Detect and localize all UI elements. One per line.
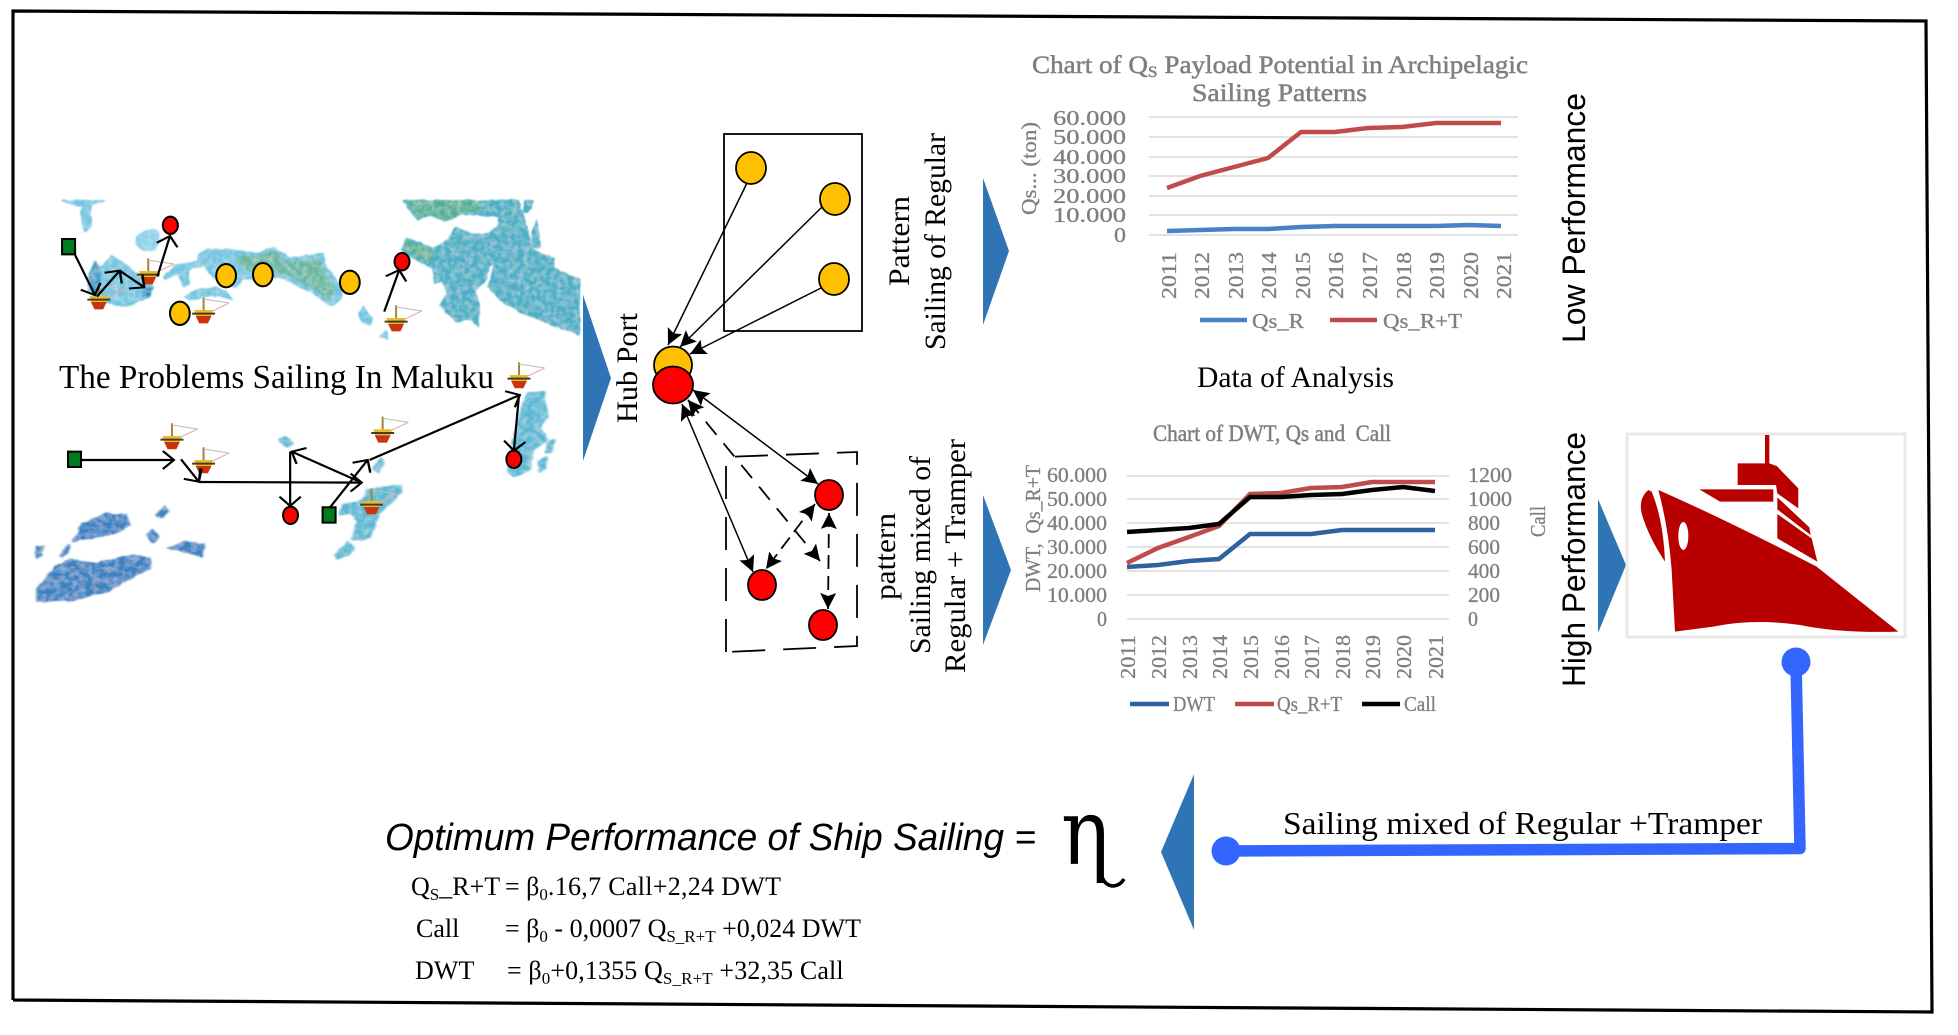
- y axis labels: 0: [1114, 223, 1126, 247]
- heading: optimum performance formula: Optimum Performance of Ship Sailing =: [385, 817, 1036, 859]
- x axis years: [1116, 634, 1448, 679]
- x axis years: 2014: [1257, 251, 1281, 299]
- equation: DWT: +32,35 Call: [713, 956, 844, 985]
- left y axis labels: 50.000: [1047, 487, 1107, 511]
- map islands: north west group: [62, 201, 387, 340]
- label: pattern sailing of regular: [883, 133, 952, 350]
- equation: Call: S_R+T: [666, 927, 716, 946]
- equation: DWT: DWT: [415, 956, 475, 985]
- series: Qs_R+T: [1127, 482, 1435, 563]
- arrow: map to hub port: [583, 295, 611, 461]
- label: low performance: Low Performance: [1556, 93, 1592, 343]
- y axis labels: 60.000: [1053, 106, 1126, 130]
- equation: Qs R+T: 0: [539, 885, 548, 904]
- arrow: regular pattern to chart: [983, 178, 1009, 325]
- chart title: [1032, 52, 1528, 107]
- chart title: Chart of DWT, Qs and Call: [1153, 421, 1391, 446]
- y axis labels: 20.000: [1053, 184, 1126, 208]
- gridlines: [1127, 476, 1449, 619]
- panel: mixed pattern dashed box: [726, 452, 857, 652]
- left y axis labels: 20.000: [1047, 559, 1107, 583]
- y axis labels: 10.000: [1053, 203, 1126, 227]
- chart title: Sailing Patterns: [1192, 80, 1367, 107]
- right y axis labels: 1200: [1468, 463, 1512, 487]
- x axis years: 2012: [1190, 252, 1214, 299]
- equation: Call: Call: [416, 914, 459, 943]
- right y axis title: Call: [1526, 506, 1550, 537]
- x axis years: 2011: [1157, 252, 1181, 299]
- left y axis labels: 30.000: [1047, 535, 1107, 559]
- label: pattern sailing mixed: Sailing mixed of: [904, 456, 937, 654]
- label: pattern sailing mixed: [869, 439, 972, 673]
- x axis years: 2012: [1147, 635, 1171, 679]
- symbol: eta: η: [1061, 779, 1109, 886]
- equation: Qs R+T: _R+T: [438, 872, 500, 901]
- y axis labels: [1053, 106, 1126, 247]
- series: Qs_R: [1167, 225, 1501, 231]
- regular port nodes: [736, 152, 850, 295]
- chart legend: Qs_R+T: [1383, 309, 1462, 333]
- equation: DWT: = β: [507, 956, 542, 985]
- chart legend: DWT: [1173, 692, 1215, 716]
- x axis years: 2015: [1239, 635, 1263, 679]
- right y axis labels: 600: [1468, 535, 1500, 559]
- left y axis labels: 10.000: [1047, 583, 1107, 607]
- x axis years: 2016: [1270, 635, 1294, 679]
- label: hub port: Hub Port: [611, 312, 644, 423]
- label: pattern sailing of regular: Pattern: [883, 196, 916, 286]
- right y axis labels: 1000: [1468, 487, 1512, 511]
- mixed route arrows: [682, 390, 829, 609]
- chart title: S: [1148, 64, 1158, 81]
- y axis title: Qs... (ton): [1017, 122, 1041, 215]
- equation: DWT: +0,1355 Q: [550, 956, 663, 985]
- ship glyph: [1641, 435, 1898, 632]
- equation: Qs R+T: S: [430, 885, 439, 904]
- x axis years: 2016: [1324, 252, 1348, 299]
- regression equations: [411, 872, 861, 988]
- equation: Qs R+T: .16,7 Call+2,24 DWT: [548, 872, 781, 901]
- arrow: mixed pattern to chart: [983, 495, 1011, 645]
- ship frame: [1627, 434, 1905, 637]
- icon: red ship in frame: [1627, 434, 1905, 637]
- equation: Call: = β: [505, 914, 539, 943]
- equation: Call: - 0,0007 Q: [548, 914, 667, 943]
- chart legend: Qs_R: [1252, 309, 1304, 333]
- chart title: Payload Potential in Archipelagic: [1158, 52, 1528, 79]
- label: pattern sailing mixed: pattern: [869, 513, 902, 600]
- map islands: north east mass: [402, 201, 579, 335]
- equation: Qs R+T: Q: [411, 872, 430, 901]
- map islands: south group: [36, 392, 555, 602]
- series: Qs_R+T: [1167, 123, 1501, 188]
- right y axis labels: 400: [1468, 559, 1500, 583]
- x axis years: 2019: [1425, 252, 1449, 299]
- right y axis labels: 800: [1468, 511, 1500, 535]
- label: high performance: High Performance: [1556, 432, 1592, 687]
- label: pattern sailing of regular: Sailing of Regular: [919, 133, 952, 350]
- chart legend: [1130, 692, 1436, 716]
- right y axis labels: [1468, 463, 1512, 631]
- y axis labels: 30.000: [1053, 164, 1126, 188]
- x axis years: 2013: [1178, 635, 1202, 679]
- line chart: DWT, Qs and Call: [1021, 421, 1550, 716]
- x axis years: 2015: [1291, 252, 1315, 299]
- map heading: The Problems Sailing In Maluku: [59, 359, 494, 396]
- label: pattern sailing mixed: Regular + Tramper: [939, 439, 972, 673]
- chart title: Chart of Q: [1032, 52, 1139, 79]
- line chart: Qs payload potential: [1017, 52, 1528, 333]
- network diagram: regular and tramper routes: [653, 134, 862, 652]
- x axis years: 2021: [1424, 635, 1448, 679]
- right y axis labels: 200: [1468, 583, 1500, 607]
- x axis years: 2014: [1208, 634, 1232, 679]
- x axis years: 2017: [1358, 252, 1382, 299]
- x axis years: 2017: [1300, 635, 1324, 679]
- x axis years: [1157, 251, 1516, 299]
- label: sailing mixed of regular + tramper: Sailing mixed of Regular +Tramper: [1283, 805, 1762, 841]
- gridlines: [1149, 117, 1518, 235]
- chart legend: Qs_R+T: [1277, 692, 1342, 716]
- regular route arrows: [668, 183, 822, 354]
- x axis years: 2019: [1361, 635, 1385, 679]
- right y axis labels: 0: [1468, 607, 1478, 631]
- equation: Qs R+T: = β: [505, 872, 539, 901]
- equation: Call: 0: [539, 927, 548, 946]
- x axis years: 2018: [1331, 635, 1355, 679]
- arrow: high performance to ship: [1598, 499, 1626, 633]
- route arrows on map: [75, 236, 520, 507]
- left y axis labels: 60.000: [1047, 463, 1107, 487]
- equation: Call: +0,024 DWT: [716, 914, 861, 943]
- arrow: to optimum performance: [1161, 774, 1194, 930]
- left y axis labels: 0: [1097, 607, 1107, 631]
- series: Call: [1127, 487, 1435, 532]
- chart legend: Call: [1404, 692, 1436, 716]
- series: DWT: [1127, 530, 1435, 567]
- panel: regular pattern box: [724, 134, 862, 331]
- map port markers: [62, 217, 521, 524]
- tramper port nodes: [748, 480, 843, 640]
- x axis years: 2011: [1116, 635, 1140, 679]
- x axis years: 2013: [1224, 252, 1248, 299]
- equation: DWT: S_R+T: [663, 969, 713, 988]
- equation: DWT: 0: [542, 969, 550, 988]
- left y axis labels: [1047, 463, 1107, 631]
- map panel: the problems sailing in Maluku: [36, 201, 579, 602]
- left y axis title: DWT, Qs_R+T: [1021, 465, 1045, 592]
- chart legend: [1200, 309, 1462, 333]
- x axis years: 2018: [1392, 252, 1416, 299]
- x axis years: 2021: [1492, 252, 1516, 299]
- label: data of analysis: Data of Analysis: [1197, 361, 1394, 394]
- ship icons on map: [87, 258, 545, 514]
- x axis years: 2020: [1392, 635, 1416, 679]
- connector: ship back to optimum performance: [1212, 648, 1810, 866]
- x axis years: 2020: [1459, 252, 1483, 299]
- y axis labels: 40.000: [1053, 145, 1126, 169]
- hub port nodes: [653, 346, 693, 404]
- y axis labels: 50.000: [1053, 125, 1126, 149]
- left y axis labels: 40.000: [1047, 511, 1107, 535]
